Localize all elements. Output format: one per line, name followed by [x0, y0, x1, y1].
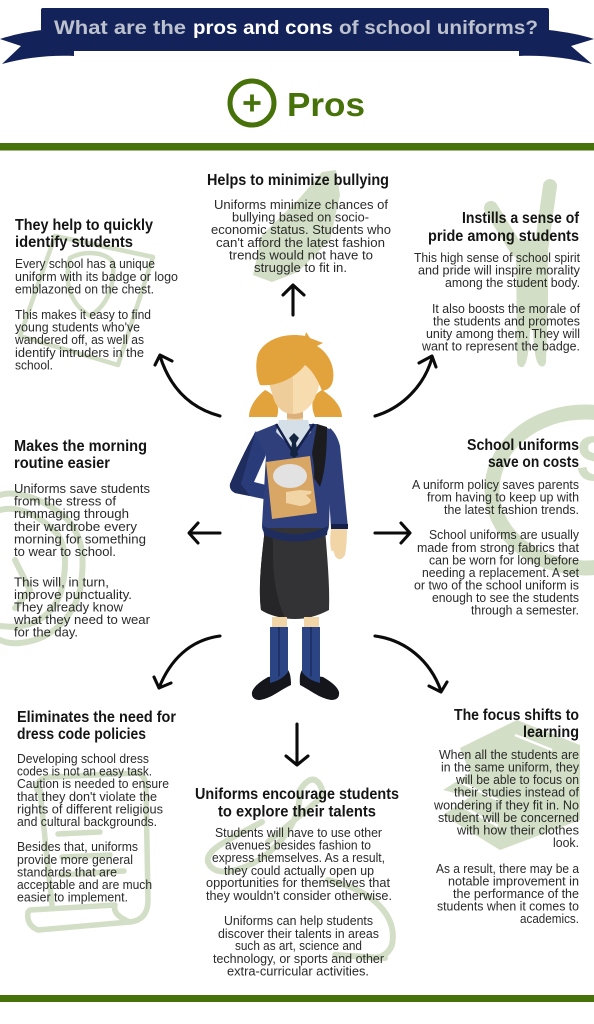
text: dress code policies: Besides that, uniforms — [17, 839, 138, 854]
text: identify students: This makes it easy to find — [15, 307, 151, 322]
bottom green divider — [0, 995, 594, 1002]
text: minimize bullying: Uniforms minimize chances of — [214, 197, 388, 212]
text: explore talents: discover their talents in areas — [218, 926, 379, 941]
panel: focus on learning — [433, 707, 580, 926]
tie — [289, 433, 299, 458]
jersey hem — [263, 526, 328, 542]
text: explore talents: they wouldn't consider otherwise. — [206, 888, 392, 903]
text: focus on learning: students when it comes to — [437, 898, 579, 914]
text: focus on learning — [433, 747, 580, 926]
text: morning routine: Uniforms save students — [14, 481, 150, 496]
text: morning routine: morning for something — [14, 532, 146, 546]
arrow: down — [286, 724, 308, 765]
arrow: right — [375, 523, 410, 543]
text: focus on learning: look. — [553, 835, 579, 850]
panel: dress code policies — [17, 709, 176, 904]
heading: save on costs: School uniforms — [467, 437, 579, 454]
text: morning routine: from the stress of — [14, 494, 116, 508]
book — [266, 456, 317, 519]
heading: explore talents — [195, 786, 399, 820]
heading: save on costs — [467, 437, 579, 471]
heading: explore talents: to explore their talents — [218, 804, 376, 820]
panel: sense of pride — [414, 210, 580, 354]
text: minimize bullying: can't afford the latest fashion — [216, 235, 385, 250]
panel: morning routine — [13, 438, 151, 640]
text: explore talents: such as art, science and — [235, 938, 362, 953]
shoes — [252, 670, 339, 700]
illustration: student — [230, 332, 348, 700]
text: focus on learning: notable improvement in — [448, 874, 579, 888]
face — [268, 360, 293, 414]
text: explore talents: avenues besides fashion to — [225, 838, 371, 852]
text: explore talents: Uniforms can help students — [224, 913, 373, 928]
text: focus on learning: in the same uniform, they — [441, 760, 579, 774]
heading: dress code policies — [17, 709, 176, 743]
jersey — [254, 424, 332, 541]
text: save on costs: made from strong fabrics that — [417, 540, 579, 555]
heading: sense of pride: Instills a sense of — [462, 210, 580, 227]
text: sense of pride: and pride will inspire morality — [418, 262, 580, 278]
heading: focus on learning — [454, 707, 579, 741]
text: identify students: emblazoned on the chest. — [15, 282, 154, 296]
text: sense of pride: This high sense of school spirit — [414, 250, 580, 265]
text: morning routine: improve punctuality. — [14, 587, 132, 602]
text: explore talents: express themselves. As a result, — [212, 850, 385, 865]
text: sense of pride: want to represent the badge. — [421, 338, 580, 354]
left arm — [230, 431, 286, 503]
text: morning routine: to wear to school. — [14, 544, 116, 559]
free hand — [330, 529, 347, 559]
text: identify students: young students who've — [15, 320, 140, 334]
arrow: lower left — [154, 636, 220, 688]
text: save on costs — [412, 477, 579, 618]
arrow: lower right — [375, 636, 447, 692]
title banner: pros and cons — [193, 17, 333, 39]
hair pigtails — [249, 390, 342, 417]
arrow: upper left — [155, 355, 220, 416]
text: identify students: school. — [15, 358, 53, 372]
text: minimize bullying: trends would not have to — [229, 248, 373, 262]
heading: identify students: identify students — [15, 234, 133, 251]
text: focus on learning: When all the students are — [439, 747, 579, 762]
arrow: up — [283, 285, 304, 315]
text: morning routine: This will, in turn, — [14, 574, 109, 590]
text: dress code policies: provide more general — [17, 852, 133, 867]
text: dress code policies: that they don't violate the — [17, 789, 157, 804]
text: morning routine: They already know — [14, 600, 124, 614]
text: identify students: wandered off, as well as — [14, 332, 144, 347]
pros heading: Pros — [287, 86, 365, 123]
text: sense of pride: unity among them. They will — [426, 326, 580, 341]
text: dress code policies: standards that are — [17, 864, 117, 880]
heading: morning routine — [14, 438, 147, 472]
text: explore talents: technology, or sports and other — [213, 951, 385, 966]
text: focus on learning: the performance of the — [453, 886, 579, 901]
text: minimize bullying: struggle to fit in. — [254, 260, 347, 275]
text: save on costs: the latest fashion trends. — [444, 502, 579, 517]
hand holding book — [286, 490, 311, 506]
text: dress code policies: Caution is needed to ensure — [17, 776, 169, 791]
background icon: cheering student — [491, 186, 550, 367]
heading: identify students: They help to quickly — [15, 217, 153, 234]
text: save on costs: can be worn for long before — [429, 552, 579, 568]
top green divider — [0, 143, 594, 150]
text: morning routine: rummaging through — [14, 506, 129, 521]
background icon: scroll — [28, 773, 148, 930]
jersey v-neck trim — [276, 424, 314, 454]
text: focus on learning: wondering if they fit in. No — [433, 798, 579, 812]
panel: explore talents — [195, 786, 399, 978]
text: minimize bullying — [211, 197, 391, 275]
text: save on costs: A uniform policy saves parents — [412, 477, 579, 492]
text: focus on learning: academics. — [520, 911, 579, 926]
socks — [270, 627, 320, 683]
heading: sense of pride: pride among students — [428, 228, 579, 245]
panel: minimize bullying — [207, 172, 391, 275]
satchel purple — [318, 470, 330, 502]
skirt — [260, 528, 329, 619]
text: save on costs: from having to keep up with — [427, 490, 579, 504]
text: save on costs: School uniforms are usually — [429, 527, 579, 542]
book label — [273, 464, 307, 488]
text: sense of pride: among the student body. — [445, 275, 580, 290]
right arm — [326, 428, 348, 528]
text: dress code policies: and cultural backgrounds. — [17, 814, 157, 829]
text: focus on learning: will be able to focus on — [455, 772, 579, 787]
text: dress code policies: acceptable and are much — [17, 877, 152, 892]
heading: focus on learning: learning — [523, 724, 579, 741]
neck — [287, 408, 303, 432]
text: save on costs: or two of the school uniform is — [414, 578, 579, 592]
text: identify students: Every school has a unique — [15, 256, 155, 271]
title banner: What are the — [54, 17, 186, 39]
text: minimize bullying: bullying based on socio- — [232, 210, 369, 224]
heading: dress code policies: Eliminates the need for — [17, 709, 176, 726]
heading: save on costs: save on costs — [488, 454, 579, 471]
heading: explore talents: Uniforms encourage students — [195, 786, 399, 803]
text: save on costs: through a semester. — [471, 602, 579, 618]
background icon: badge — [20, 236, 153, 365]
text: identify students: identify intruders in the — [15, 345, 144, 360]
text: focus on learning: As a result, there may be a — [436, 861, 580, 876]
text: minimize bullying: economic status. Students who — [211, 222, 391, 237]
background icon: raised fist — [253, 170, 340, 282]
text: save on costs: enough to see the students — [432, 590, 579, 605]
pros heading — [230, 81, 365, 125]
heading: dress code policies: dress code policies — [17, 726, 146, 743]
heading: identify students — [15, 217, 153, 251]
text: morning routine: their wardrobe every — [14, 519, 138, 534]
background icon: stack of books — [443, 720, 580, 850]
text: identify students — [14, 256, 178, 372]
text: morning routine — [13, 481, 151, 640]
text: dress code policies: easier to implement. — [17, 890, 128, 904]
text: explore talents — [206, 825, 392, 978]
text: focus on learning: student will be concerned — [438, 810, 579, 825]
legs — [272, 617, 319, 628]
panel: save on costs — [412, 437, 579, 618]
text: sense of pride: the students and promotes — [433, 314, 580, 328]
bag strap — [312, 424, 327, 487]
text: explore talents: opportunities for themselves that — [206, 875, 390, 890]
heading: focus on learning: The focus shifts to — [454, 707, 579, 724]
text: explore talents: extra-curricular activities. — [227, 964, 369, 978]
text: sense of pride: It also boosts the morale of — [432, 301, 580, 316]
heading: morning routine: routine easier — [14, 455, 110, 472]
background icon: dollar coin — [492, 412, 594, 568]
arrow: left — [189, 523, 220, 543]
heading: morning routine: Makes the morning — [14, 438, 147, 455]
title banner: of school uniforms? — [339, 17, 538, 39]
arrow: upper right — [375, 356, 436, 416]
text: dress code policies: rights of different religious — [17, 802, 163, 816]
text: save on costs: needing a replacement. A set — [422, 565, 579, 580]
hair top — [256, 332, 333, 391]
shirt collar — [276, 420, 311, 450]
heading: sense of pride — [428, 210, 580, 245]
text: morning routine: for the day. — [14, 624, 78, 640]
text: morning routine: what they need to wear — [13, 612, 151, 627]
text: sense of pride — [414, 250, 580, 354]
title banner — [0, 8, 594, 64]
background icon: school crest — [0, 494, 83, 643]
text: dress code policies — [17, 751, 169, 904]
text: focus on learning: with how their clothes — [456, 822, 579, 838]
text: explore talents: they could actually open up — [224, 863, 374, 878]
background icon: microscope — [208, 780, 393, 958]
text: dress code policies: codes is not an easy task. — [17, 764, 152, 778]
panel: quickly identify students — [14, 217, 178, 372]
text: dress code policies: Developing school dress — [17, 751, 149, 766]
heading: minimize bullying: Helps to minimize bullying — [207, 172, 389, 189]
text: focus on learning: their studies instead of — [454, 784, 579, 800]
text: identify students: uniform with its badge or logo — [15, 269, 178, 284]
text: explore talents: Students will have to use other — [215, 825, 383, 840]
